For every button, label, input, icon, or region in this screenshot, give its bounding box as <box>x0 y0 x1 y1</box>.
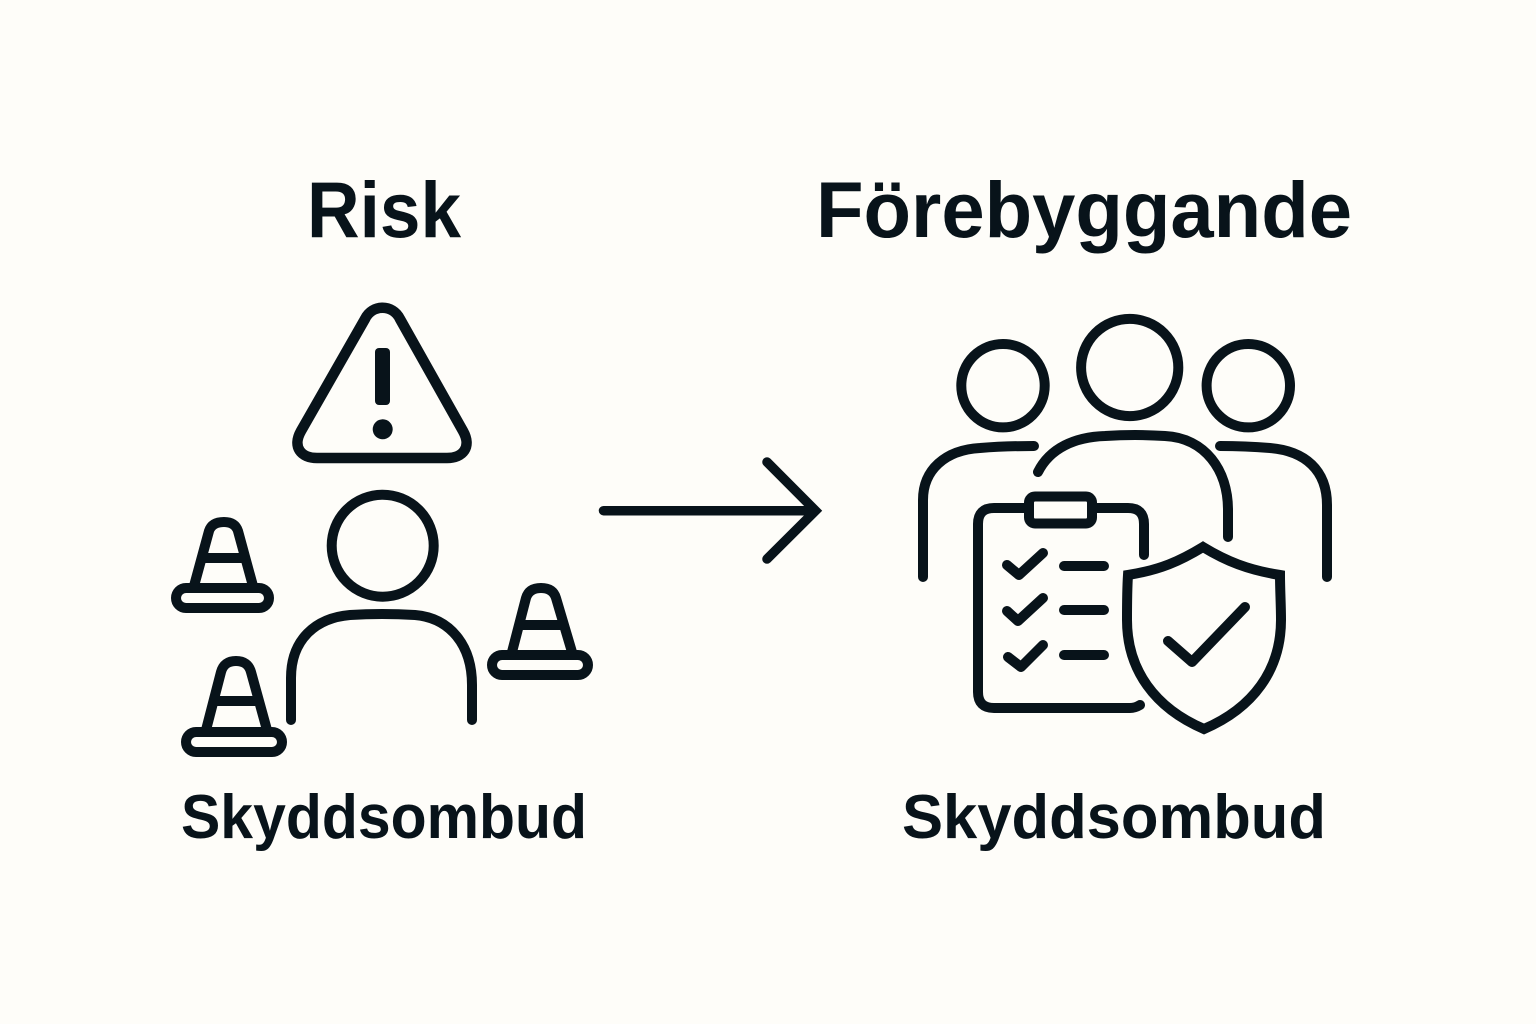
label: Skyddsombud right: Skyddsombud <box>902 783 1326 852</box>
icon: warning triangle <box>297 308 467 458</box>
icon: traffic cone lower left <box>186 661 282 752</box>
icon: checklist clipboard <box>978 496 1144 708</box>
heading: Risk: Risk <box>307 165 462 254</box>
label: Skyddsombud left: Skyddsombud <box>181 783 587 852</box>
icon: traffic cone right <box>492 588 588 675</box>
icon: person at risk <box>291 495 472 720</box>
heading: Förebyggande: Förebyggande <box>816 165 1352 254</box>
icon: traffic cone upper left <box>176 522 269 608</box>
arrow: risk to prevention <box>604 462 816 559</box>
icon: group of three people <box>923 319 1327 577</box>
icon: shield with check <box>1127 547 1281 729</box>
